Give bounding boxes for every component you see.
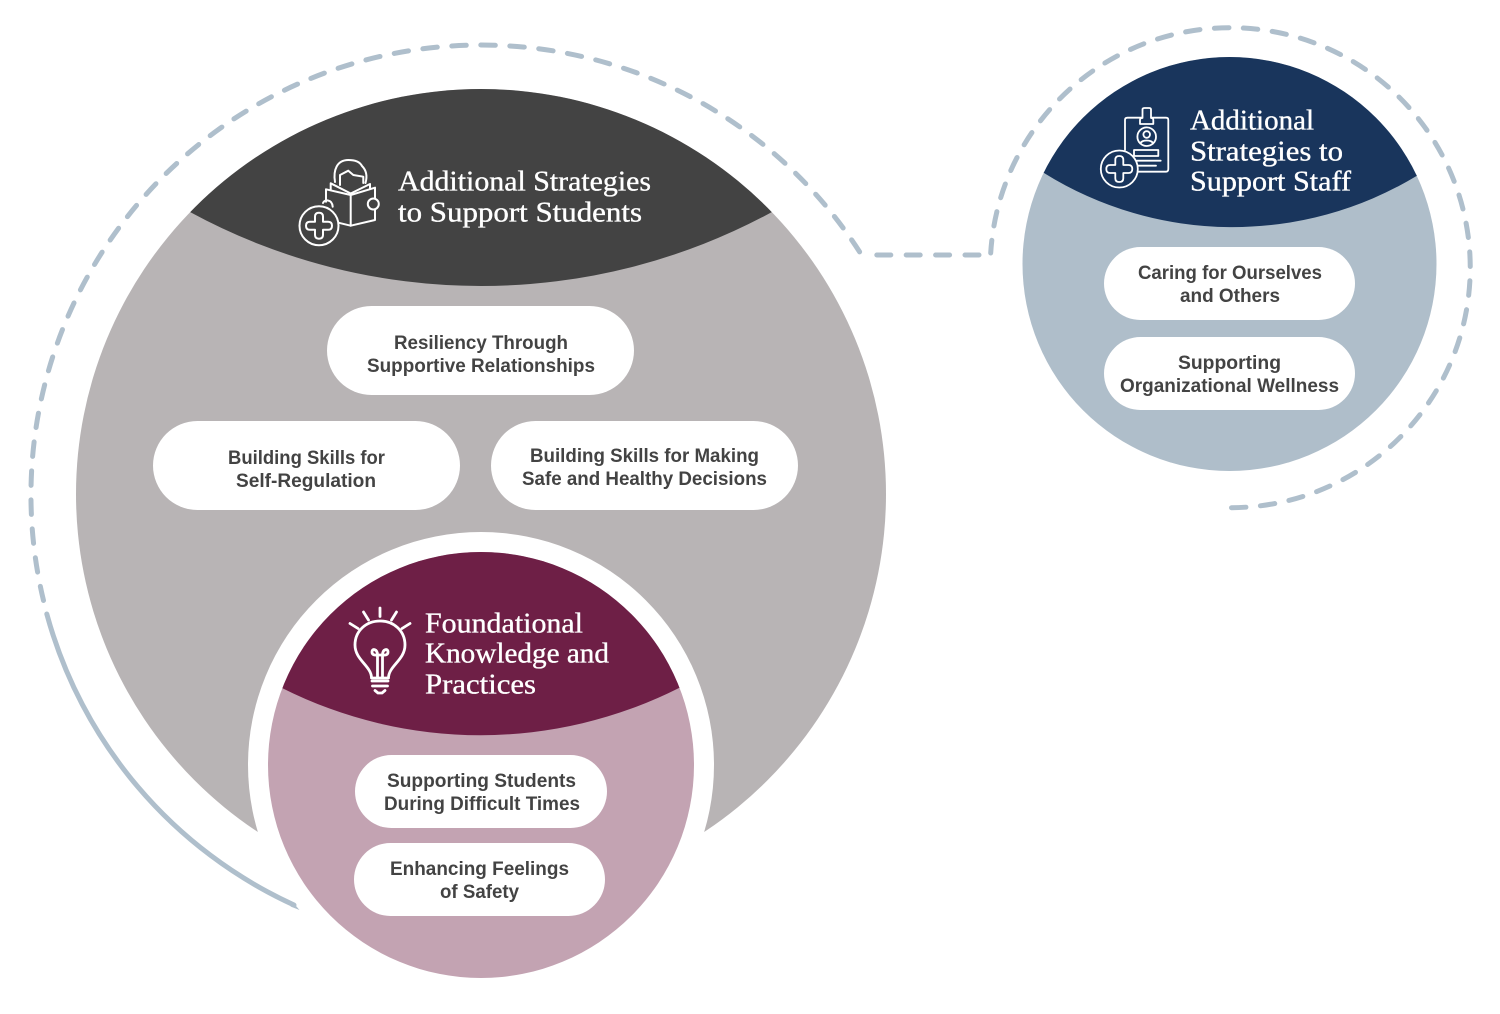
heading: foundational: Foundational <box>425 608 583 640</box>
pill: self-regulation: Building Skills for <box>228 448 386 469</box>
pill: healthy decisions <box>491 421 798 510</box>
pill: safety: Enhancing Feelings <box>390 859 569 880</box>
panel: foundational knowledge and practices <box>260 540 700 978</box>
pill: resiliency: Supportive Relationships <box>367 356 595 377</box>
pill: organizational wellness: Supporting <box>1178 353 1281 374</box>
heading: students: to Support Students <box>398 198 642 228</box>
panel: additional strategies to support students <box>76 89 886 832</box>
pill: healthy decisions: Building Skills for Making <box>530 446 759 467</box>
pill: organizational wellness: Organizational Wellness <box>1120 376 1339 397</box>
heading: foundational: Knowledge and <box>425 638 609 670</box>
icon: id badge with plus <box>1101 108 1168 188</box>
heading: students: Additional Strategies <box>398 166 651 198</box>
heading: staff: Strategies to <box>1190 136 1343 168</box>
pill: difficult times: Supporting Students <box>387 771 576 792</box>
heading: foundational: Practices <box>425 670 536 700</box>
heading: staff: Additional <box>1190 106 1314 136</box>
heading band: staff <box>1044 57 1417 228</box>
white ring around foundational circle <box>240 532 720 1014</box>
heading: staff: Support Staff <box>1190 166 1352 198</box>
pill: difficult times: During Difficult Times <box>384 794 580 815</box>
pill: resiliency: Resiliency Through <box>394 333 568 354</box>
heading band: students <box>190 89 772 286</box>
pill: organizational wellness <box>1104 337 1355 410</box>
pill: caring: Caring for Ourselves <box>1138 263 1322 284</box>
pill: safety: of Safety <box>440 882 519 903</box>
pill: caring <box>1104 247 1355 320</box>
pill: safety <box>354 843 605 916</box>
pill: caring: and Others <box>1180 286 1280 307</box>
icon: light bulb <box>350 608 410 693</box>
pill: healthy decisions: Safe and Healthy Decisions <box>522 469 767 490</box>
icon: reader with book and plus <box>300 160 379 245</box>
pill: resiliency <box>327 306 634 395</box>
pill: self-regulation <box>153 421 460 510</box>
pill: self-regulation: Self-Regulation <box>236 471 376 492</box>
panel: additional strategies to support staff <box>1020 40 1440 471</box>
heading band: foundational <box>282 552 680 736</box>
pill: difficult times <box>355 755 607 828</box>
